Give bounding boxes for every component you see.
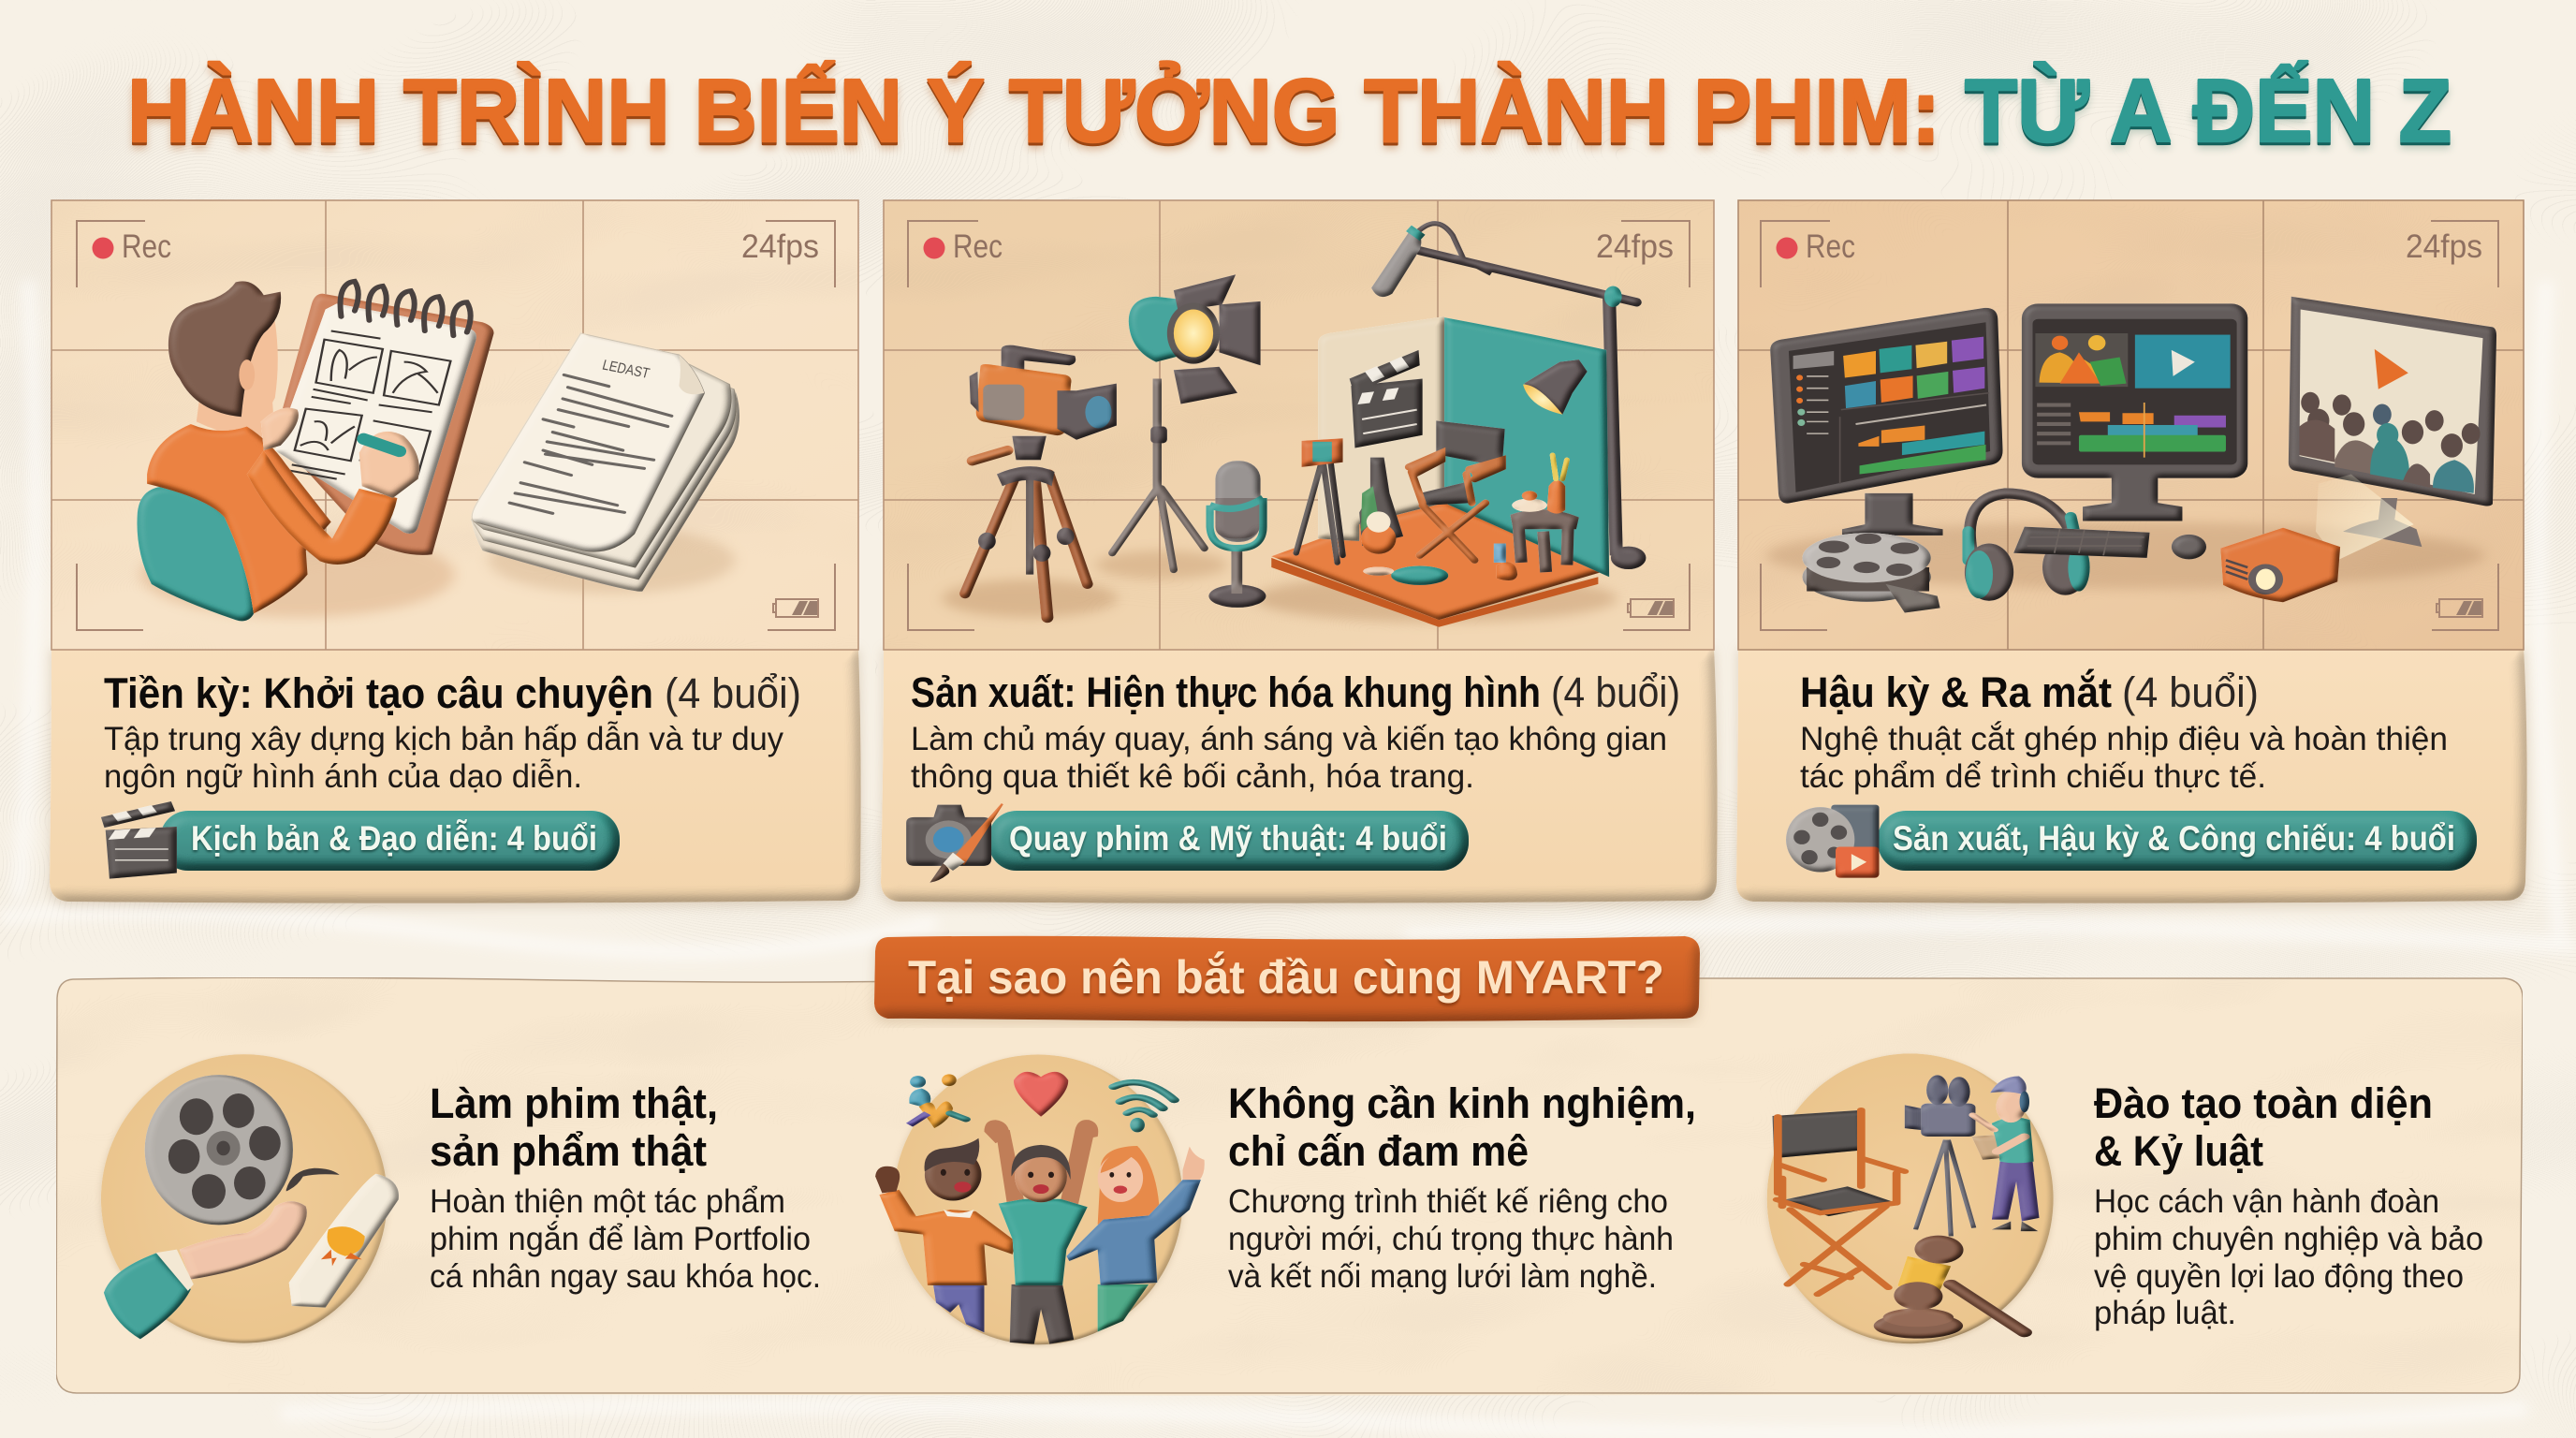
description: pre-production: Tập trung xây dựng kịch bản hấp dẫn và tư duy (104, 721, 783, 757)
props (1296, 438, 1579, 585)
viewfinder overlay: Rec (122, 228, 171, 265)
man (197, 360, 275, 437)
panel body (56, 977, 2523, 1395)
heading (430, 1079, 718, 1175)
heading: Làm phim thật, (430, 1079, 718, 1127)
heading (2094, 1079, 2433, 1175)
viewfinder overlay: 24fps (1596, 228, 1674, 265)
film reel (1802, 533, 1940, 612)
pill: production, post and screening (1786, 805, 2477, 878)
description: production: Làm chủ máy quay, ánh sáng và kiến tạo không gian (911, 721, 1667, 757)
boom pole (1371, 224, 1646, 569)
icon: director chair, crew and gavel (1767, 1053, 2054, 1343)
director chair (1773, 1110, 1896, 1216)
paper stack (472, 378, 739, 592)
heart and signals (909, 1072, 1174, 1132)
teal chair (137, 486, 256, 621)
description: Học cách vận hành đoàn (2094, 1183, 2439, 1220)
set floor (1271, 558, 1598, 627)
pill: production, post and screening: Sản xuất, Hậu kỳ & Công chiếu: 4 buổi (1893, 819, 2455, 858)
heading: pre-production: Tiền kỳ: Khởi tạo câu chuyện (104, 669, 653, 717)
heading: post-production: (4 buổi) (2122, 668, 2259, 716)
viewfinder overlay: Rec (1806, 228, 1855, 265)
director chair (1409, 420, 1505, 560)
viewfinder photo (1738, 200, 2524, 650)
benefit: no experience needed (875, 1054, 1696, 1344)
description: production (911, 721, 1667, 795)
heading: production: Sản xuất: Hiện thực hóa khung hình (911, 668, 1541, 716)
spiral rings (341, 281, 471, 336)
pill: cinematography and art: Quay phim & Mỹ thuật: 4 buổi (1009, 819, 1447, 858)
viewfinder overlay: 24fps (741, 228, 819, 265)
heading: post-production: Hậu kỳ & Ra mắt (1800, 668, 2112, 716)
description: phim ngắn để làm Portfolio (430, 1221, 811, 1257)
pill: screenwriting and directing (101, 801, 620, 879)
title: HÀNH TRÌNH BIẾN Ý TƯỞNG THÀNH PHIM: (127, 60, 1940, 161)
heading: production: (4 buổi) (1551, 668, 1680, 716)
icon: reel, hand and diploma (101, 1054, 399, 1343)
description: cá nhân ngay sau khóa học. (430, 1258, 821, 1295)
keyboard and mouse (2013, 527, 2206, 559)
viewfinder overlay: 24fps (2406, 228, 2482, 265)
benefit: comprehensive training (1767, 1053, 2483, 1343)
heading: Đào tạo toàn diện (2094, 1079, 2433, 1127)
description (1228, 1183, 1674, 1295)
clapper on wall (1350, 350, 1423, 448)
description: production: thông qua thiết kê bối cảnh, hóa trang. (911, 758, 1474, 795)
panel: post-production card (1736, 200, 2527, 903)
monitor two (2022, 303, 2247, 521)
description: post-production: Nghệ thuật cắt ghép nhịp điệu và hoàn thiện (1800, 721, 2448, 757)
heading (1228, 1079, 1696, 1175)
banner: Tại sao nên bắt đầu cùng MYART? (908, 951, 1664, 1004)
panel: production card (881, 200, 1718, 903)
icon: clapperboard (101, 801, 177, 879)
description: và kết nối mạng lưới làm nghề. (1228, 1258, 1657, 1295)
icon: reel and play (1786, 805, 1880, 878)
viewfinder overlay (77, 221, 835, 630)
heading: & Kỷ luật (2094, 1127, 2263, 1175)
heading: pre-production: (4 buổi) (665, 669, 801, 717)
notebook page (275, 303, 476, 534)
viewfinder overlay: Rec (953, 228, 1003, 265)
description: phim chuyên nghiệp và bảo (2094, 1221, 2483, 1257)
gavel (1874, 1232, 2025, 1339)
description (430, 1183, 821, 1295)
card body (881, 646, 1718, 903)
heading: Không cần kinh nghiệm, (1228, 1079, 1696, 1127)
description: post-production (1800, 721, 2448, 795)
camera on tripod (1905, 1075, 1975, 1236)
projector (2220, 528, 2340, 602)
viewfinder overlay (1761, 221, 2498, 630)
spotlight (1112, 274, 1261, 570)
panel: why MYART (56, 936, 2523, 1395)
description: Hoàn thiện một tác phẩm (430, 1183, 785, 1220)
heading: sản phẩm thật (430, 1127, 707, 1175)
illustration: film studio set (942, 224, 1646, 627)
projector beam (2316, 475, 2414, 560)
illustration: editing monitors, reel, headphones, projector (1766, 297, 2496, 612)
person: woman in blue (1066, 1146, 1205, 1332)
monitor three with audience (2289, 297, 2496, 547)
description: người mới, chú trọng thực hành (1228, 1221, 1674, 1257)
crew member (1971, 1076, 2039, 1231)
person: man in orange (875, 1138, 1016, 1332)
notebook board (275, 294, 494, 555)
benefit: real film (101, 1054, 821, 1343)
monitor one (1770, 308, 2003, 536)
viewfinder photo (51, 200, 858, 650)
icon: three cheering people (875, 1054, 1205, 1344)
microphone (1208, 461, 1266, 608)
storyboard frames (289, 330, 450, 479)
viewfinder photo (884, 200, 1714, 650)
description: vệ quyền lợi lao động theo (2094, 1258, 2464, 1295)
title: TỪ A ĐẾN Z (1965, 60, 2452, 161)
illustration: man drawing storyboard with script pages (137, 281, 739, 621)
description: Chương trình thiết kế riêng cho (1228, 1183, 1668, 1220)
card body (1736, 646, 2527, 903)
card body (50, 646, 861, 903)
icon: camera and paintbrush (906, 804, 1003, 883)
banner (874, 936, 1700, 1021)
pill: screenwriting and directing: Kịch bản & Đạo diễn: 4 buổi (191, 819, 597, 858)
description: pháp luật. (2094, 1295, 2236, 1331)
viewfinder overlay (908, 221, 1690, 630)
illustration: man drawing storyboard with script pages: LEDAST (601, 357, 651, 382)
panel: pre-production card (50, 200, 861, 903)
heading: chỉ cấn đam mê (1228, 1127, 1529, 1175)
description: pre-production: ngôn ngữ hình ánh của dạo diễn. (104, 758, 582, 795)
description: post-production: tác phẩm dể trình chiếu thực tế. (1800, 758, 2266, 795)
tripod and camera (965, 345, 1117, 618)
pill: cinematography and art (906, 804, 1469, 883)
set walls (1318, 316, 1444, 541)
headphones (1965, 493, 2090, 601)
description: pre-production (104, 721, 783, 795)
wall lamp (1524, 360, 1588, 415)
description (2094, 1183, 2483, 1331)
person: woman in teal (984, 1120, 1098, 1344)
